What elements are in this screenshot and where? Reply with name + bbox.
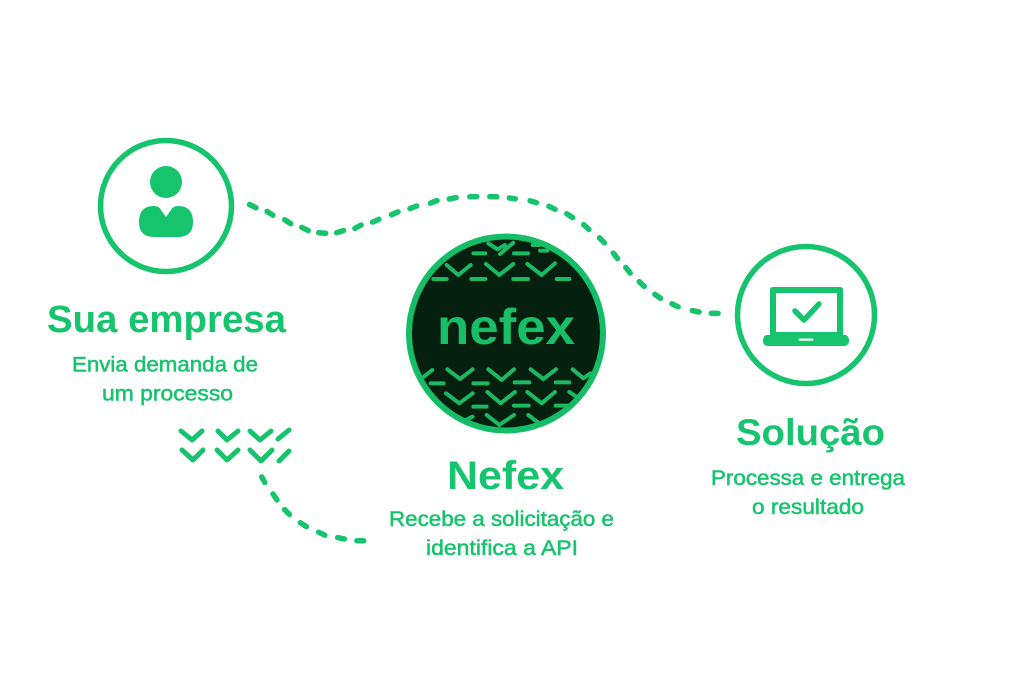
logo: nefex badge [409,236,603,430]
icon: chevron pattern [181,430,289,461]
arrow: dotted path from Sua empresa to Solução [250,197,718,313]
heading: Nefex: Nefex [447,454,564,498]
text: description: identifica a API [426,537,578,560]
text: description: um processo [102,382,233,406]
infographic canvas [48,138,906,556]
panel: Sua empresa [47,140,287,406]
text: description: Envia demanda de [72,354,258,376]
text: description: o resultado [752,496,864,519]
heading: Sua empresa: Sua empresa [47,299,287,341]
heading: Solução: Solução [736,412,885,453]
pattern: chevrons and bars [422,243,591,425]
logo wordmark: nefex [437,299,575,355]
arrow: dotted path from chevrons to Nefex [262,477,364,541]
text: description: Recebe a solicitação e [389,508,614,531]
icon: person in circle [100,140,232,272]
panel: Nefex [389,236,620,560]
text: description: Processa e entrega [711,467,905,490]
icon: laptop with check in circle [738,246,874,384]
panel: Solução [711,246,911,519]
